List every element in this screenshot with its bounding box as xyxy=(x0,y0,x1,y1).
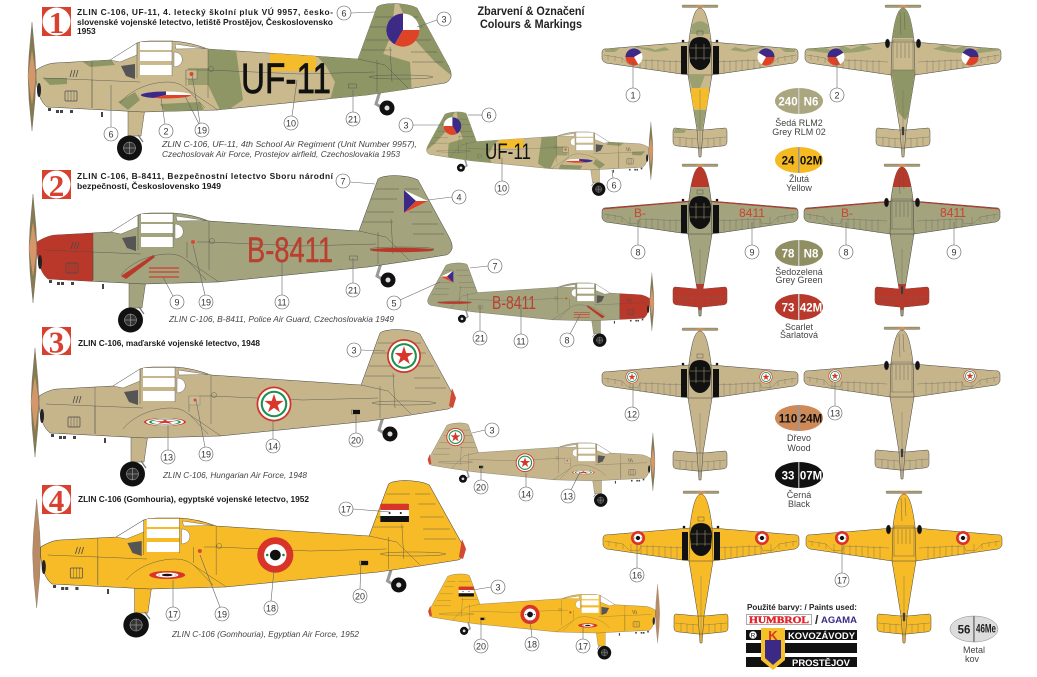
callouts small aircraft 4: 3 xyxy=(495,582,501,592)
callouts small aircraft 2: 7 xyxy=(492,262,498,272)
swatch: metal 56 46Me xyxy=(950,616,998,664)
swatch: yellow 24 02M: 02M xyxy=(800,156,822,168)
callouts aircraft 3: 19 xyxy=(201,450,211,460)
badge 4: 4 xyxy=(49,483,64,518)
swatch: wood 110 24M: 24M xyxy=(800,414,822,426)
top view 3 upper xyxy=(602,328,798,480)
callouts aircraft 1: 19 xyxy=(197,126,207,136)
aircraft 2 side view xyxy=(29,176,452,332)
wing registrations aircraft 2: B- xyxy=(841,206,853,220)
callouts aircraft 4: 20 xyxy=(355,592,365,602)
callouts aircraft 2: 11 xyxy=(277,298,287,308)
callouts top view 2: 8 xyxy=(843,248,849,258)
callouts small aircraft 2: 5 xyxy=(391,298,397,308)
callouts top view 4: 17 xyxy=(837,576,847,586)
swatch: black 33 07M: Černá xyxy=(787,490,811,500)
small aircraft 1: UF-11 xyxy=(485,139,531,164)
callouts small aircraft 3: 3 xyxy=(489,426,495,436)
callouts small aircraft 2 xyxy=(387,259,580,348)
swatch: grey 240 N6: Grey RLM 02 xyxy=(772,127,826,137)
aircraft 3 side view xyxy=(31,330,456,486)
callouts aircraft 4 xyxy=(166,502,390,621)
swatch: grey green 78 N8: 78 xyxy=(782,248,795,260)
Kovozavody Prostejov logo xyxy=(746,628,857,670)
callouts small aircraft 3: 20 xyxy=(476,482,486,492)
callouts top view 4 xyxy=(630,545,849,587)
callouts aircraft 2: 19 xyxy=(201,298,211,308)
callouts small aircraft 1: 10 xyxy=(497,184,507,194)
section 1 heading: ZLIN C-106, UF-11, 4. letecký školní pluk VÚ 9957, česko- xyxy=(77,6,333,17)
paints used logos xyxy=(746,603,858,670)
callouts top view 3 xyxy=(625,383,842,421)
paints used logos: / xyxy=(815,613,819,627)
callouts aircraft 1: 2 xyxy=(163,126,169,136)
callouts small aircraft 1: 6 xyxy=(486,110,492,120)
swatch: scarlet 73 42M xyxy=(775,294,823,340)
callouts top view 2 xyxy=(631,220,961,259)
title: Zbarvení & Označení xyxy=(478,4,585,18)
Kovozavody Prostejov logo: K xyxy=(768,628,778,643)
Humbrol logo: HUMBROL xyxy=(749,616,809,626)
callouts aircraft 1: 10 xyxy=(286,118,296,128)
callouts small aircraft 4 xyxy=(473,580,590,653)
wing registrations aircraft 2: 8411 xyxy=(739,206,765,220)
title: Colours & Markings xyxy=(480,17,582,31)
swatch: wood 110 24M: Dřevo xyxy=(787,433,811,443)
Kovozavody Prostejov logo: KOVOZÁVODY xyxy=(788,631,855,641)
callouts aircraft 2 xyxy=(163,174,466,309)
top view 4 under xyxy=(806,491,1002,643)
badge 1: 1 xyxy=(49,5,64,40)
swatch: wood 110 24M: Wood xyxy=(787,443,811,453)
callouts aircraft 1: 6 xyxy=(108,130,114,140)
swatch: metal 56 46Me: kov xyxy=(965,654,979,664)
caption 2: ZLIN C-106, B-8411, Police Air Guard, Czechoslovakia 1949 xyxy=(168,314,394,324)
callouts top view 1: 2 xyxy=(834,90,840,100)
section 1 heading xyxy=(42,5,333,40)
small aircraft 3 xyxy=(428,423,655,507)
swatch: grey 240 N6: 240 xyxy=(778,96,798,108)
callouts small aircraft 4: 18 xyxy=(527,640,537,650)
aircraft 4 side view xyxy=(33,480,466,638)
small aircraft 2: B-8411 xyxy=(492,293,536,313)
wing registrations aircraft 2: B- xyxy=(634,206,646,220)
callouts small aircraft 4: 20 xyxy=(476,642,486,652)
wing registrations aircraft 2 xyxy=(634,205,966,220)
callouts aircraft 3 xyxy=(161,343,385,464)
swatch: yellow 24 02M xyxy=(775,147,823,193)
callouts small aircraft 2: 8 xyxy=(564,336,570,346)
callouts top view 3: 12 xyxy=(627,410,637,420)
swatch: scarlet 73 42M: 73 xyxy=(782,302,794,314)
aircraft 2 side view: B-8411 xyxy=(247,231,333,270)
callouts small aircraft 4: 17 xyxy=(578,642,588,652)
top view 1 upper xyxy=(602,5,798,157)
callouts aircraft 3: 20 xyxy=(351,436,361,446)
callouts aircraft 1: 6 xyxy=(341,8,347,18)
wing registrations aircraft 2: 8411 xyxy=(940,205,966,220)
swatch: metal 56 46Me: 46Me xyxy=(976,624,996,636)
paints used logos: Použité barvy: / Paints used: xyxy=(747,603,857,612)
callouts small aircraft 3: 13 xyxy=(563,492,573,502)
callouts aircraft 2: 9 xyxy=(174,298,180,308)
section 1 heading: 1953 xyxy=(77,26,96,36)
swatch: grey 240 N6: N6 xyxy=(804,96,818,108)
callouts small aircraft 1: 3 xyxy=(403,120,409,130)
swatch: wood 110 24M: 110 xyxy=(779,414,797,426)
Kovozavody Prostejov logo: R xyxy=(751,632,756,640)
swatch: grey 240 N6 xyxy=(772,88,826,137)
section 3 heading xyxy=(42,324,260,360)
callouts small aircraft 1: 6 xyxy=(611,180,617,190)
title xyxy=(478,4,585,31)
swatch: scarlet 73 42M: 42M xyxy=(800,302,822,314)
callouts top view 2: 8 xyxy=(635,248,641,258)
callouts small aircraft 1 xyxy=(399,108,621,195)
callouts aircraft 2: 21 xyxy=(348,286,358,296)
callouts small aircraft 2: 11 xyxy=(516,336,526,346)
top view 2 upper xyxy=(602,164,798,316)
callouts aircraft 3: 14 xyxy=(268,442,278,452)
callouts small aircraft 3 xyxy=(472,423,580,503)
callouts top view 1 xyxy=(626,58,844,102)
top view 4 upper xyxy=(603,491,799,643)
swatch: yellow 24 02M: Yellow xyxy=(786,183,812,193)
badge 2: 2 xyxy=(49,168,64,203)
small aircraft 1 xyxy=(426,111,653,196)
caption 1 xyxy=(161,139,417,159)
swatch: black 33 07M: 07M xyxy=(800,470,822,482)
swatch: scarlet 73 42M: Scarlet xyxy=(785,322,814,332)
badge 1 xyxy=(42,5,71,40)
callouts top view 3: 13 xyxy=(830,408,840,418)
small aircraft 2 xyxy=(428,263,654,347)
section 4 heading: ZLIN C-106 (Gomhouria), egyptské vojenské letectvo, 1952 xyxy=(78,494,309,504)
swatch: grey green 78 N8: Grey Green xyxy=(775,275,823,285)
section 2 heading: bezpečností, Československo 1949 xyxy=(77,180,221,191)
swatch: metal 56 46Me: 56 xyxy=(958,624,970,636)
badge 4 xyxy=(42,483,71,518)
callouts aircraft 4: 17 xyxy=(168,610,178,620)
badge 3 xyxy=(42,324,71,360)
section 1 heading: slovenské vojenské letectvo, letiště Prostějov, Československo xyxy=(77,16,333,27)
badge 2 xyxy=(42,168,71,203)
section 3 heading: ZLIN C-106, maďarské vojenské letectvo, 1948 xyxy=(78,338,260,348)
callouts small aircraft 3: 14 xyxy=(521,490,531,500)
callouts aircraft 4: 18 xyxy=(266,604,276,614)
callouts aircraft 3: 3 xyxy=(351,346,357,356)
callouts small aircraft 2: 21 xyxy=(475,334,485,344)
callouts top view 4: 16 xyxy=(632,570,642,580)
top view 3 under xyxy=(804,327,1000,479)
callouts aircraft 1: 21 xyxy=(348,114,358,124)
swatch: wood 110 24M xyxy=(775,405,823,453)
caption 1: Czechoslovak Air Force, Prostejov airfield, Czechoslovakia 1953 xyxy=(162,149,400,159)
caption 1: ZLIN C-106, UF-11, 4th School Air Regiment (Unit Number 9957), xyxy=(161,139,417,149)
badge 3: 3 xyxy=(49,324,64,360)
callouts top view 2: 9 xyxy=(951,248,957,258)
swatch: black 33 07M: 33 xyxy=(782,470,794,482)
swatch: grey green 78 N8 xyxy=(775,240,823,285)
swatch: black 33 07M: Black xyxy=(788,499,810,509)
caption 3: ZLIN C-106, Hungarian Air Force, 1948 xyxy=(162,470,307,480)
swatch: metal 56 46Me: Metal xyxy=(963,645,985,655)
swatch: scarlet 73 42M: Šarlatová xyxy=(780,330,818,340)
section 2 heading xyxy=(42,168,334,203)
top view 2 under xyxy=(804,164,1000,316)
section 4 heading xyxy=(42,483,309,518)
swatch: black 33 07M xyxy=(775,462,823,509)
callouts aircraft 2: 4 xyxy=(456,192,462,202)
swatch: grey 240 N6: Šedá RLM2 xyxy=(775,118,823,128)
top view 1 under xyxy=(805,5,1001,157)
Agama logo: AGAMA xyxy=(821,615,858,625)
callouts aircraft 3: 13 xyxy=(163,452,173,462)
swatch: yellow 24 02M: 24 xyxy=(782,156,795,168)
aircraft 1 side view xyxy=(28,2,452,160)
caption 4: ZLIN C-106 (Gomhouria), Egyptian Air Force, 1952 xyxy=(171,629,359,639)
aircraft 1 side view: UF-11 xyxy=(241,55,331,103)
Kovozavody Prostejov logo: PROSTĚJOV xyxy=(792,657,850,668)
callouts aircraft 2: 7 xyxy=(340,176,346,186)
small aircraft 4 xyxy=(428,574,660,659)
callouts aircraft 1: 3 xyxy=(441,14,447,24)
swatch: yellow 24 02M: Žlutá xyxy=(789,174,809,184)
callouts top view 1: 1 xyxy=(630,90,636,100)
callouts aircraft 4: 19 xyxy=(217,610,227,620)
callouts aircraft 4: 17 xyxy=(341,504,351,514)
callouts aircraft 1 xyxy=(104,6,451,141)
swatch: grey green 78 N8: Šedozelená xyxy=(775,267,823,277)
section 2 heading: ZLIN C-106, B-8411, Bezpečnostní letectvo Sboru národní xyxy=(77,171,334,181)
swatch: grey green 78 N8: N8 xyxy=(804,248,819,260)
callouts top view 2: 9 xyxy=(749,248,755,258)
